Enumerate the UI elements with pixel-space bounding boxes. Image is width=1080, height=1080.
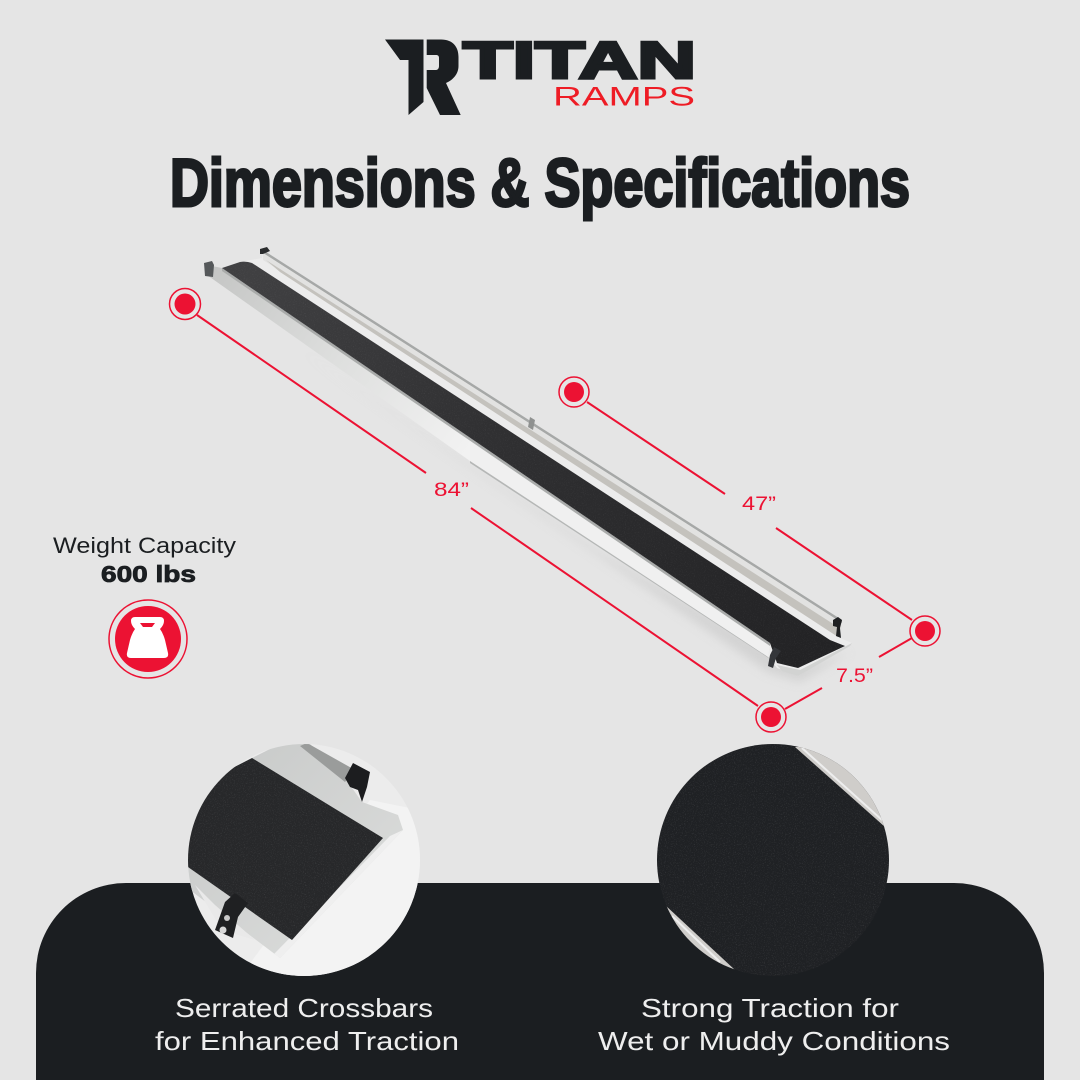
detail photo: serrated crossbars	[170, 743, 420, 977]
caption: strong traction: Strong Traction for	[641, 993, 899, 1023]
dimension: 47 inch length	[559, 377, 940, 646]
dark bottom panel	[36, 883, 1044, 1080]
title: Dimensions & Specifications	[170, 145, 910, 221]
aluminium edge bottom left	[666, 906, 734, 970]
ramp shadow	[300, 350, 850, 682]
grip mat close-up	[657, 744, 889, 883]
white gap below mat	[196, 886, 245, 932]
grip mat close-up	[170, 758, 383, 940]
label 47: 47”	[742, 494, 776, 515]
ramp deck	[207, 250, 852, 676]
logo mark	[385, 40, 461, 115]
detail photo: strong traction	[655, 744, 895, 977]
icon: kettlebell	[109, 600, 187, 678]
aluminium edge top right	[795, 746, 884, 826]
dimension: 7.5 inch width	[785, 638, 912, 709]
logo: Titan Ramps	[385, 32, 696, 115]
logo wordmark TITAN: TITAN	[463, 32, 696, 90]
label 84: 84”	[434, 480, 469, 501]
top rail	[300, 744, 350, 782]
grip mat	[222, 262, 845, 668]
weight capacity value: 600 lbs	[101, 561, 196, 587]
top bracket	[345, 763, 370, 802]
logo wordmark RAMPS: RAMPS	[553, 82, 695, 112]
caption: serrated crossbars	[155, 993, 459, 1056]
ramp product image	[204, 247, 852, 682]
caption: strong traction	[598, 993, 950, 1056]
dimension: 84 inch length	[170, 288, 786, 732]
far side rail	[263, 250, 842, 637]
photo background	[190, 883, 418, 976]
label 7.5: 7.5”	[836, 666, 873, 687]
weight capacity label: Weight Capacity	[53, 533, 236, 558]
bottom bracket	[215, 893, 248, 938]
caption: strong traction: Wet or Muddy Conditions	[598, 1026, 950, 1056]
weight capacity callout	[53, 533, 236, 678]
caption: serrated crossbars: Serrated Crossbars	[175, 993, 433, 1023]
end brackets	[204, 261, 214, 277]
near side rail	[207, 265, 852, 676]
caption: serrated crossbars: for Enhanced Traction	[155, 1026, 459, 1056]
aluminium plate	[188, 744, 403, 958]
